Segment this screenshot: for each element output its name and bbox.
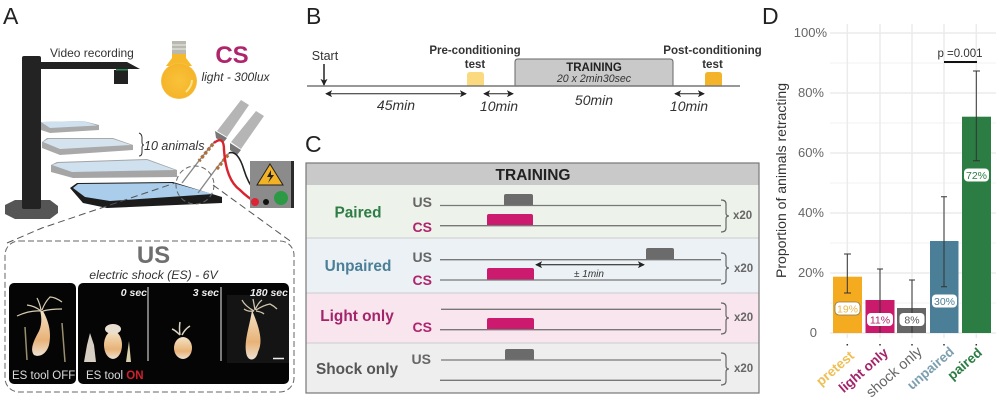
lines — [440, 309, 721, 330]
duration: 45 min: 45min — [377, 97, 415, 113]
y axis labels: 40% — [798, 205, 824, 220]
panel letter D: D — [762, 3, 779, 29]
row label: Light only — [320, 308, 394, 325]
x axis labels — [813, 343, 985, 401]
header text: TRAINING — [496, 167, 570, 184]
CS label: CS — [413, 319, 432, 335]
start label: Start — [312, 49, 339, 63]
US label: US — [412, 351, 431, 367]
callout: US electric shock — [5, 241, 294, 392]
y axis labels: 80% — [798, 85, 824, 100]
pre-conditioning label: Pre-conditioning — [429, 45, 521, 57]
duration: 50 min: 50min — [575, 92, 613, 108]
bar: paired — [962, 71, 991, 333]
bar: light only — [866, 269, 894, 333]
brace — [721, 253, 729, 284]
dashed zoom lines — [7, 183, 293, 243]
value label — [867, 313, 893, 326]
heading: US: US — [137, 242, 170, 269]
lines — [440, 206, 721, 226]
brace — [721, 303, 729, 334]
caption: ES tool ON: ES tool ON — [86, 370, 144, 382]
heading: CS: CS — [215, 42, 249, 69]
pre-conditioning test block — [467, 72, 484, 86]
label: video recording: Video recording — [50, 46, 134, 60]
pre-conditioning label: test — [465, 59, 485, 71]
x axis ticks — [847, 344, 976, 346]
US pulse — [504, 194, 533, 206]
US label: US — [413, 249, 432, 265]
p value: p =0.001 — [937, 48, 983, 60]
y axis title: Proportion of animals retracting — [774, 83, 789, 278]
arrow: one minute interval — [536, 264, 644, 266]
panel A: experimental setup — [3, 3, 294, 392]
CS label: CS — [413, 219, 432, 235]
CS label: CS — [413, 272, 432, 288]
training repeats: 20 x 2min30sec — [556, 73, 632, 85]
CS pulse — [487, 318, 534, 330]
post-conditioning label: Post-conditioning — [663, 44, 762, 57]
panel letter A: A — [3, 3, 19, 29]
US label: US — [413, 194, 432, 210]
timeline axis — [307, 85, 740, 87]
x axis labels: shock only — [863, 343, 926, 401]
repeat count: x20 — [733, 210, 752, 222]
row label: Paired — [334, 204, 382, 222]
icon: light bulb — [161, 41, 197, 99]
post-conditioning test block — [705, 72, 722, 86]
y axis labels: 0 — [810, 325, 817, 340]
training block — [515, 59, 673, 86]
start arrow — [323, 64, 325, 85]
photo: ES tool off — [9, 283, 76, 384]
US pulse — [505, 349, 534, 360]
CS pulse — [487, 214, 533, 226]
time label 180 sec: 180 sec — [250, 287, 288, 299]
panel letter B: B — [306, 3, 321, 29]
arrow: 10 min span after training — [675, 93, 704, 95]
stacked trays — [41, 121, 222, 208]
panel letter C: C — [305, 131, 322, 157]
x axis labels: pretest — [813, 348, 857, 389]
panel B: timeline — [306, 3, 762, 114]
brace — [721, 353, 729, 385]
US pulse — [646, 248, 674, 260]
y axis labels: 20% — [798, 265, 824, 280]
dashed callout frame — [5, 241, 294, 392]
bar: unpaired: 30% — [934, 296, 955, 308]
row label: Unpaired — [325, 258, 391, 275]
bar: paired: 72% — [966, 170, 987, 182]
grid — [830, 24, 996, 338]
row: light only — [320, 303, 753, 335]
value label — [835, 302, 860, 315]
table header — [306, 163, 759, 185]
significance bracket — [944, 61, 977, 63]
row backgrounds — [306, 185, 759, 393]
row: unpaired — [325, 248, 753, 288]
text: light 300 lux: light - 300lux — [201, 70, 271, 84]
value label — [900, 313, 924, 326]
lines — [440, 260, 721, 280]
repeat count: x20 — [734, 312, 753, 324]
table frame — [306, 163, 759, 393]
interval label: ± 1min — [574, 269, 604, 280]
stand with camera — [5, 56, 140, 219]
arrow: 45 min span — [326, 93, 466, 95]
bar: shock only: 8% — [904, 314, 920, 326]
brace: ten animals — [139, 133, 144, 156]
bar: shock only — [897, 280, 926, 333]
lines — [440, 360, 721, 380]
row label: Shock only — [316, 361, 398, 378]
bar: light only: 11% — [870, 314, 890, 326]
x axis labels: paired — [945, 345, 985, 383]
panel D: bar chart — [762, 3, 996, 401]
time label 0 sec: 0 sec — [121, 287, 147, 299]
y axis labels — [794, 25, 827, 340]
row: shock only — [316, 349, 753, 385]
value label — [964, 168, 989, 182]
bar: pretest — [833, 254, 862, 333]
y axis labels: 100% — [794, 25, 827, 40]
bar: unpaired — [930, 197, 958, 333]
caption: ES tool OFF — [12, 370, 75, 382]
training label: TRAINING — [566, 62, 622, 74]
row: paired — [334, 194, 752, 235]
photo: ES tool on time series — [78, 283, 289, 384]
bar: pretest: 19% — [837, 304, 858, 316]
duration: 10 min before training: 10min — [480, 98, 518, 114]
CS pulse — [487, 268, 534, 280]
panel C: training protocols — [305, 131, 759, 393]
repeat count: x20 — [734, 263, 753, 275]
arrow: 10 min span before training — [484, 93, 513, 95]
text: electric shock: electric shock (ES) - 6V — [89, 268, 220, 282]
electric shock tool — [176, 100, 266, 204]
value label — [932, 294, 957, 308]
duration: 10 min after training: 10min — [670, 98, 708, 114]
x axis labels: light only — [836, 345, 891, 396]
time label 3 sec: 3 sec — [193, 287, 219, 299]
stimulator box — [250, 161, 294, 208]
post-conditioning label: test — [702, 58, 723, 71]
repeat count: x20 — [734, 363, 753, 375]
y axis labels: 60% — [798, 145, 824, 160]
brace — [721, 200, 729, 232]
x axis labels: unpaired — [904, 344, 957, 393]
text: 10 animals: 10 animals — [144, 139, 204, 153]
